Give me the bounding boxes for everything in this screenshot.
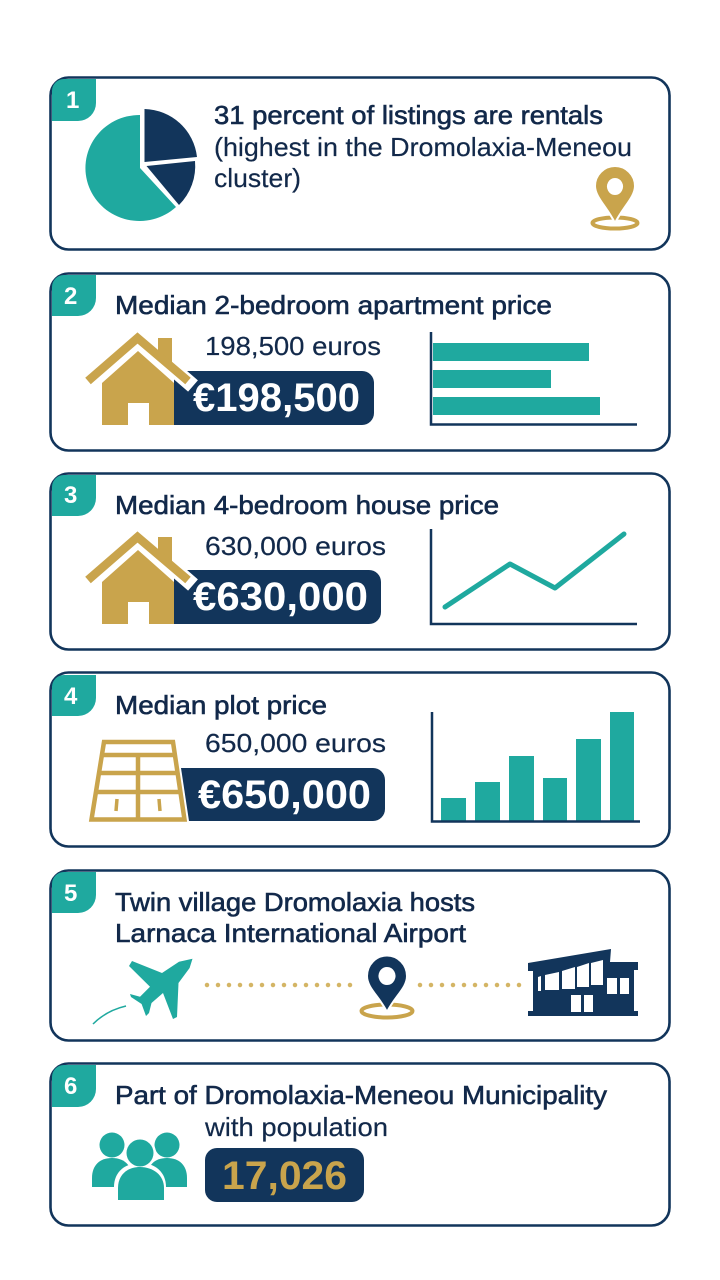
badge 3: 3 <box>64 482 77 509</box>
badge 5 <box>52 872 96 913</box>
heading <box>115 887 475 948</box>
panel 5: airport <box>50 870 670 1040</box>
heading: Median 2-bedroom apartment price <box>115 290 552 320</box>
price pill <box>174 371 374 425</box>
population pill <box>205 1148 364 1202</box>
value text: 198,500 euros <box>205 331 381 361</box>
price pill: €630,000 <box>193 575 368 619</box>
badge 2: 2 <box>64 283 77 310</box>
icon: gold house <box>88 537 193 624</box>
price pill: €198,500 <box>193 376 360 420</box>
horizontal bar chart <box>431 332 637 424</box>
icon: gold land plot <box>92 742 184 820</box>
pie chart <box>85 109 197 221</box>
badge 4 <box>52 675 96 716</box>
badge 1 <box>52 79 96 121</box>
icon: airport terminal <box>528 949 638 1016</box>
icon: gold location pin <box>592 166 638 228</box>
badge 5: 5 <box>64 880 77 907</box>
heading: Median plot price <box>115 690 327 720</box>
icon: navy location pin <box>362 955 412 1018</box>
price pill: €650,000 <box>198 773 371 817</box>
line chart <box>431 529 637 624</box>
panel 1: rentals share <box>50 78 670 250</box>
rentals text: 31 percent of listings are rentals <box>214 100 603 130</box>
heading: Larnaca International Airport <box>115 918 467 948</box>
panel 6: population <box>50 1064 670 1226</box>
badge 3 <box>52 475 96 516</box>
panel 4: plot price <box>50 672 670 846</box>
badge 6 <box>52 1065 96 1107</box>
heading: Median 4-bedroom house price <box>115 490 499 520</box>
rentals text: cluster) <box>214 163 301 193</box>
badge 1: 1 <box>66 87 79 114</box>
icon: gold house <box>88 338 193 425</box>
population pill: 17,026 <box>222 1154 347 1198</box>
column chart <box>432 712 640 822</box>
value text: 630,000 euros <box>205 531 386 561</box>
rentals text: (highest in the Dromolaxia-Meneou <box>214 132 632 162</box>
value text: 650,000 euros <box>205 728 386 758</box>
price pill <box>174 570 381 624</box>
icon: teal airplane <box>93 959 192 1024</box>
icon: people group <box>92 1132 187 1203</box>
panel 2: apartment price <box>50 274 670 450</box>
heading: Twin village Dromolaxia hosts <box>115 887 475 917</box>
sub text: with population <box>204 1112 388 1142</box>
dotted route <box>207 983 522 987</box>
heading: Part of Dromolaxia-Meneou Municipality <box>115 1080 607 1110</box>
badge 4: 4 <box>64 683 78 710</box>
price pill <box>181 768 385 821</box>
badge 2 <box>52 275 96 316</box>
badge 6: 6 <box>64 1073 77 1100</box>
panel 3: house price <box>50 474 670 650</box>
rentals text <box>214 100 632 193</box>
